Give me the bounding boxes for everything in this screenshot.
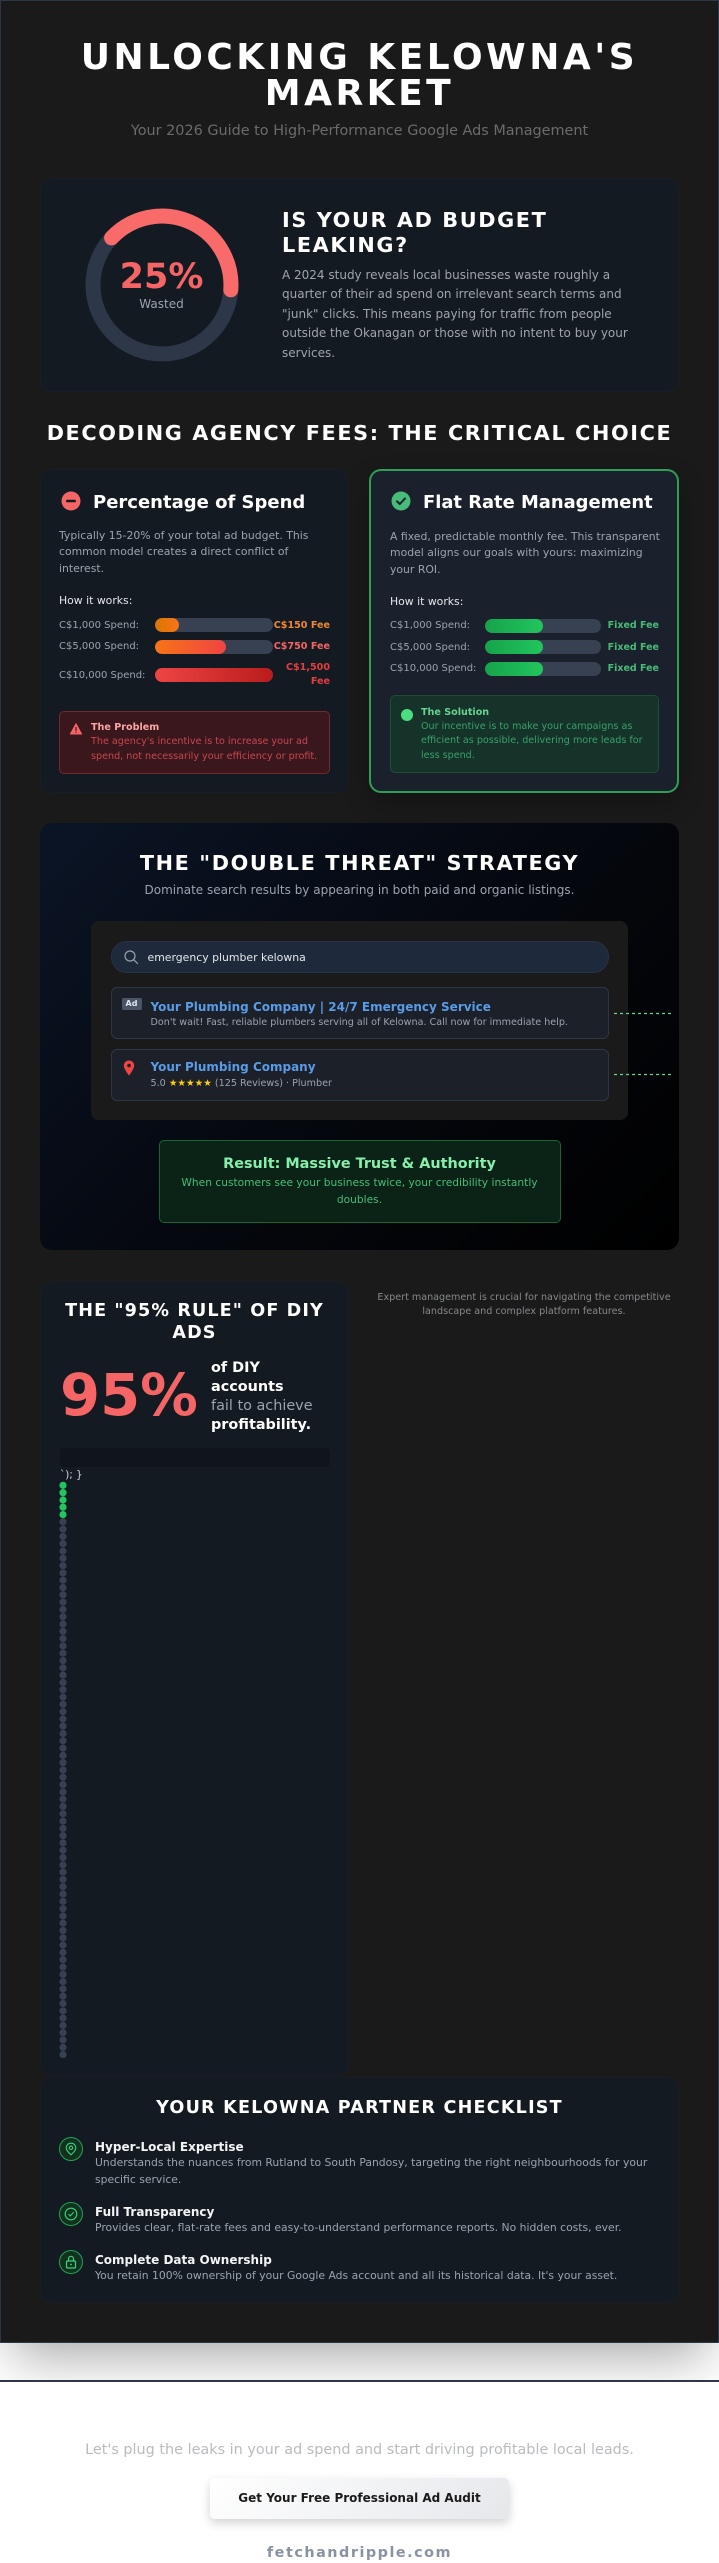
item title: Hyper-Local Expertise — [95, 2140, 244, 2154]
search bar — [110, 941, 608, 973]
callout text — [90, 722, 317, 762]
heading — [65, 1301, 324, 1343]
heading — [282, 208, 547, 257]
item title: Complete Data Ownership — [95, 2253, 272, 2267]
bar row: C$5,000 — [59, 640, 330, 654]
body text: quarter of their ad spend on irrelevant search terms and — [282, 287, 622, 301]
bar row: C$5,000: C$5,000 Spend: — [59, 641, 139, 652]
icon: map pin — [124, 1060, 134, 1076]
side note: Expert management is crucial for navigating the competitive — [377, 1292, 671, 1302]
item description: specific service. — [95, 2173, 181, 2186]
icon: magnifier — [124, 950, 138, 964]
body text: services. — [282, 346, 335, 360]
side note: landscape and complex platform features. — [422, 1306, 626, 1317]
heading: YOUR KELOWNA PARTNER CHECKLIST — [156, 2098, 563, 2118]
bar row: C$5,000 — [390, 640, 659, 654]
callout text: The Problem — [91, 722, 159, 733]
listing title: Your Plumbing Company — [150, 1060, 316, 1074]
callout text: efficient as possible, delivering more leads for — [421, 735, 643, 746]
bar row: C$10,000: Fixed Fee — [608, 663, 659, 674]
how it works label: How it works: — [390, 594, 463, 608]
donut chart: 25% wasted — [86, 208, 238, 362]
call to action button: Get Your Free Professional Ad Audit — [238, 2491, 481, 2505]
bar row: C$10,000: C$10,000 Spend: — [59, 670, 145, 680]
heading: IS YOUR AD BUDGET — [282, 208, 547, 232]
item description: You retain 100% ownership of your Google Ads account and all its historical data. It's your asset. — [95, 2269, 617, 2282]
stat description — [211, 1360, 313, 1433]
ad description: Don't wait! Fast, reliable plumbers serving all of Kelowna. Call now for immediate help. — [150, 1017, 568, 1028]
description: your ROI. — [390, 563, 441, 576]
description: interest. — [59, 562, 104, 575]
description — [390, 530, 660, 576]
callout text — [421, 706, 643, 761]
icon: shield check — [59, 2202, 83, 2226]
call to action button — [210, 2478, 509, 2519]
item description: Provides clear, flat-rate fees and easy-to-understand performance reports. No hidden costs, ever. — [95, 2221, 622, 2234]
bar row: C$5,000: C$5,000 Spend: — [390, 642, 470, 652]
description — [58, 528, 308, 575]
bar row: C$10,000 — [390, 662, 659, 676]
bar row: C$5,000: C$750 Fee — [274, 641, 330, 652]
icon: green dot — [401, 709, 413, 721]
item description — [95, 2156, 648, 2186]
bar row: C$1,000: C$1,000 Spend: — [59, 620, 139, 630]
ad badge: Ad — [126, 999, 137, 1008]
card title: Percentage of Spend — [93, 492, 305, 512]
callout text: spend, not necessarily your efficiency or profit. — [91, 751, 317, 762]
heading: THE "DOUBLE THREAT" STRATEGY — [140, 851, 579, 875]
description: Typically 15-20% of your total ad budget. This — [59, 528, 308, 542]
callout text: Our incentive is to make your campaigns as — [421, 721, 632, 732]
bar row: C$1,000: C$1,000 Spend: — [390, 620, 470, 631]
item title: Full Transparency — [95, 2205, 214, 2219]
bar row: C$10,000: Fee — [311, 676, 330, 687]
panel: flat rate management — [369, 469, 679, 793]
result text: When customers see your business twice, your credibility instantly — [181, 1176, 538, 1189]
bar row: C$1,000 — [390, 619, 659, 633]
icon: warning triangle — [70, 723, 82, 734]
result: organic listing — [110, 1049, 608, 1101]
empty dark bar — [60, 1448, 330, 1467]
ad title: Your Plumbing Company | 24/7 Emergency Service — [150, 1000, 491, 1014]
heading: LEAKING? — [282, 233, 409, 257]
icon: check circle — [392, 492, 410, 510]
bar row: C$1,000 — [59, 618, 330, 632]
donut caption: Wasted — [139, 296, 184, 310]
description: A fixed, predictable monthly fee. This transparent — [390, 530, 660, 542]
icon: minus circle — [62, 492, 80, 510]
description: common model creates a direct conflict of — [59, 545, 288, 558]
bar row: C$1,000: C$150 Fee — [274, 620, 330, 630]
checklist item: hyper-local — [59, 2137, 648, 2186]
result text: doubles. — [337, 1192, 382, 1206]
result: paid ad — [110, 987, 608, 1039]
dot column: 5 of 79 profitable — [59, 1482, 67, 2058]
bar row: C$10,000: C$1,500 — [286, 662, 330, 672]
stat description: fail to achieve — [211, 1398, 313, 1414]
panel: ad budget leak — [40, 178, 679, 392]
bar row: C$10,000: C$10,000 Spend: — [390, 663, 476, 674]
bar row: C$5,000: Fixed Fee — [608, 642, 659, 652]
side note — [377, 1292, 671, 1317]
callout: result — [158, 1140, 560, 1222]
connector lines — [614, 1012, 671, 1076]
heading: THE "95% RULE" OF DIY — [65, 1301, 324, 1321]
how it works label: How it works: — [59, 594, 132, 607]
result title: Result: Massive Trust & Authority — [223, 1156, 496, 1172]
body text: A 2024 study reveals local businesses waste roughly a — [282, 268, 610, 282]
website: fetchandripple.com — [267, 2544, 452, 2560]
closing line: Let's plug the leaks in your ad spend and start driving profitable local leads. — [85, 2442, 634, 2458]
title: UNLOCKING KELOWNA'S — [81, 37, 638, 78]
footer — [0, 2380, 719, 2560]
body text — [282, 268, 628, 360]
icon: location — [59, 2137, 83, 2161]
result text — [181, 1176, 538, 1206]
section heading: agency fees: DECODING AGENCY FEES: THE CRITICAL CHOICE — [47, 421, 672, 445]
stat description: accounts — [211, 1379, 284, 1395]
callout text: less spend. — [421, 750, 475, 761]
title — [81, 37, 638, 114]
subheading: Dominate search results by appearing in both paid and organic listings. — [145, 882, 574, 896]
stray code text: `); } — [60, 1469, 83, 1481]
panel: double threat strategy — [40, 823, 679, 1250]
search results mockup — [91, 921, 628, 1120]
checklist item: transparency — [59, 2202, 622, 2234]
header — [81, 37, 638, 138]
description: model aligns our goals with yours: maximizing — [390, 546, 643, 559]
callout text: The Solution — [421, 706, 489, 718]
bar row: C$10,000 — [59, 662, 330, 687]
checklist item: data ownership — [59, 2250, 617, 2282]
search query: emergency plumber kelowna — [148, 950, 306, 964]
item description: Understands the nuances from Rutland to South Pandosy, targeting the right neighbourhoods for your — [95, 2156, 647, 2169]
stat description: of DIY — [211, 1360, 260, 1376]
callout text: The agency's incentive is to increase your ad — [91, 736, 308, 747]
card title: Flat Rate Management — [423, 492, 653, 512]
title: MARKET — [265, 73, 454, 114]
callout: the problem — [59, 711, 330, 774]
heading: ADS — [172, 1323, 217, 1343]
callout: the solution — [390, 695, 659, 773]
bar row: C$1,000: Fixed Fee — [608, 620, 659, 631]
panel: partner checklist — [40, 2077, 679, 2303]
subtitle: Your 2026 Guide to High-Performance Google Ads Management — [131, 122, 588, 138]
panel: percentage of spend — [40, 469, 348, 793]
big stat: 95% — [60, 1362, 198, 1428]
ad badge — [122, 998, 142, 1010]
donut value: 25% — [120, 257, 203, 297]
listing rating: 5.0 ★★★★★ (125 Reviews) · Plumber — [150, 1078, 332, 1089]
icon: lock — [59, 2250, 83, 2274]
body text: "junk" clicks. This means paying for traffic from people — [282, 307, 612, 321]
panel: 95% rule — [40, 1281, 349, 2076]
body text: outside the Okanagan or those with no intent to buy your — [282, 326, 628, 340]
stat description: profitability. — [211, 1417, 311, 1433]
